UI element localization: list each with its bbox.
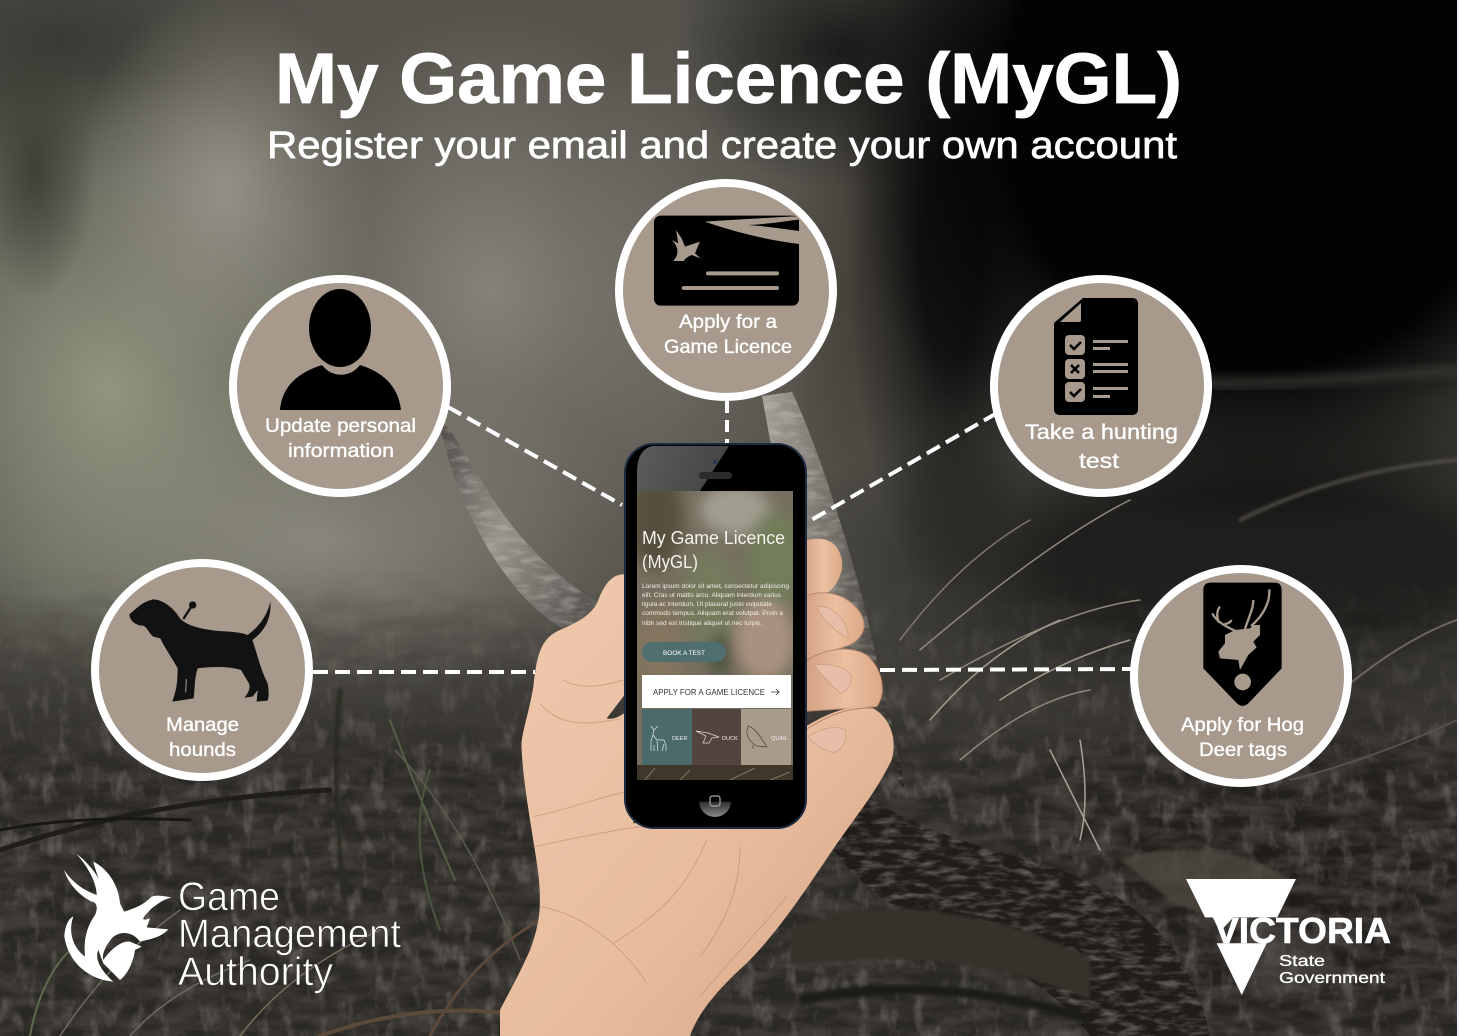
- label: [1025, 421, 1178, 473]
- phone body: [625, 444, 806, 828]
- deer tile: [642, 709, 692, 765]
- screen: [637, 491, 793, 780]
- State Government wordmark: Government: [1279, 970, 1386, 987]
- panel: take a hunting test: [994, 279, 1208, 493]
- screen body text: elit. Cras ut mattis arcu. Aliquam interdum varius: [642, 592, 781, 599]
- phone camera dot: [713, 460, 717, 464]
- subtitle: Register your email and create your own account: [267, 125, 1177, 167]
- screen body text: Lorem ipsum dolor sit amet, consectetur adipiscing: [642, 583, 789, 590]
- logo: Victoria State Government: [1186, 879, 1391, 995]
- screen body text: nibh sed est tristique aliquet ut nec turpis.: [642, 620, 762, 627]
- screen title: [642, 528, 785, 572]
- label: information: [288, 441, 394, 462]
- icon: antler and duck emblem: [64, 853, 172, 982]
- apply for a game licence button: APPLY FOR A GAME LICENCE: [653, 688, 765, 697]
- label: Game Licence: [664, 337, 792, 358]
- quail tile: QUAIL: [771, 736, 788, 742]
- book a test button: [642, 642, 726, 662]
- label: [1181, 715, 1304, 761]
- screen body text: ligula ac interdum. Ut placerat justo vulputate: [642, 601, 772, 608]
- label: Apply for a: [679, 312, 777, 333]
- home button: [699, 785, 731, 817]
- icon: deer tag: [1203, 583, 1282, 706]
- deer tile: DEER: [672, 736, 688, 742]
- palm and thumb: [500, 574, 894, 1036]
- label: Deer tags: [1199, 740, 1287, 761]
- State Government wordmark: State: [1279, 953, 1325, 970]
- icon: person silhouette: [280, 289, 401, 410]
- icon: hound silhouette: [129, 599, 271, 702]
- palm creases: [533, 680, 787, 997]
- label: test: [1079, 450, 1119, 473]
- finger 4 crease: [805, 708, 873, 730]
- dashed connector lines: [313, 401, 1131, 672]
- logo: Game Management Authority: [64, 853, 401, 994]
- finger 1: [800, 539, 842, 602]
- smartphone: [625, 444, 806, 828]
- wordmark: Authority: [178, 950, 333, 994]
- title: My Game Licence (MyGL): [275, 40, 1182, 119]
- icon: upper triangle: [1186, 879, 1296, 932]
- icon: licence card: [654, 216, 799, 306]
- finger 3: [800, 649, 882, 712]
- label: [664, 312, 792, 358]
- label: Update personal: [265, 416, 416, 437]
- wordmark: [178, 875, 401, 994]
- icon: lower triangle: [1217, 943, 1267, 995]
- screen body text: [642, 583, 789, 627]
- book a test button: BOOK A TEST: [663, 650, 705, 657]
- label: Manage: [166, 715, 239, 736]
- wordmark: Management: [178, 912, 401, 956]
- screen title: (MyGL): [642, 552, 698, 572]
- screen title: My Game Licence: [642, 528, 785, 548]
- duck tile: [692, 709, 741, 765]
- phone glare: [637, 446, 729, 491]
- screen body text: commodo tempus. Aliquam erat volutpat. Proin a: [642, 610, 783, 617]
- panel: manage hounds: [95, 563, 309, 777]
- panel: apply for a game licence: [619, 183, 833, 397]
- label: [166, 715, 239, 761]
- duck tile: DUCK: [722, 736, 738, 742]
- wordmark: Game: [178, 875, 280, 919]
- label: hounds: [169, 740, 236, 761]
- label: Apply for Hog: [1181, 715, 1304, 736]
- label: [265, 416, 416, 462]
- fingernails: [808, 607, 852, 753]
- apply for a game licence button: [642, 675, 791, 708]
- panel: update personal information: [233, 279, 447, 493]
- right white edge: [1457, 0, 1459, 1036]
- State Government wordmark: [1279, 953, 1386, 987]
- finger 2: [800, 593, 864, 662]
- quail tile: [741, 709, 791, 765]
- phone speaker: [699, 472, 732, 479]
- hand holding phone: [500, 539, 894, 1036]
- VICTORIA wordmark: VICTORIA: [1214, 910, 1391, 951]
- background details: texture, grass and antlers: [0, 364, 1457, 1036]
- label: Take a hunting: [1025, 421, 1178, 444]
- icon: checklist: [1054, 298, 1138, 415]
- panel: apply for hog deer tags: [1134, 569, 1348, 783]
